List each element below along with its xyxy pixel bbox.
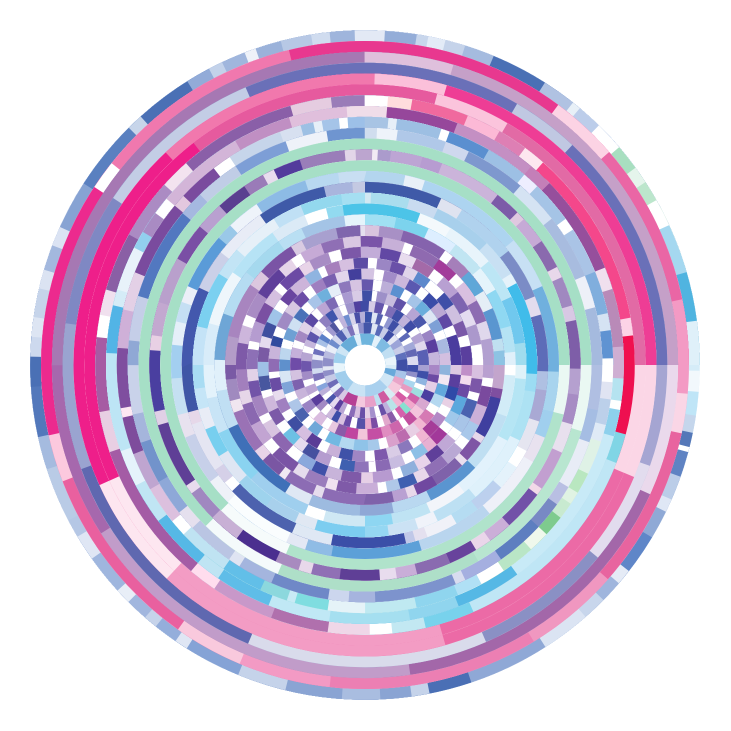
ring 4 xyxy=(68,68,662,662)
ring 26 xyxy=(306,306,424,424)
ring 5 xyxy=(79,79,651,651)
ring 9 xyxy=(122,122,608,608)
ring 22 xyxy=(263,263,467,467)
ring 8 xyxy=(112,112,618,618)
ring 21 xyxy=(252,252,478,478)
ring 27 xyxy=(317,317,413,413)
ring 14 xyxy=(176,176,554,554)
ring 29 xyxy=(339,339,391,391)
ring 16 xyxy=(198,198,532,532)
ring 28 xyxy=(328,328,402,402)
ring 12 xyxy=(155,155,575,575)
ring 15 xyxy=(187,187,543,543)
ring 23 xyxy=(274,274,456,456)
ring 13 (green) xyxy=(166,166,564,564)
ring 24 xyxy=(285,285,445,445)
ring 20 xyxy=(242,242,488,488)
ring 18 xyxy=(220,220,510,510)
ring 19 xyxy=(231,231,499,499)
ring 10 xyxy=(133,133,597,597)
ring 25 xyxy=(296,296,434,434)
ring 2 xyxy=(46,46,684,684)
ring 7 xyxy=(101,101,629,629)
ring 3 xyxy=(57,57,673,673)
ring 6 xyxy=(90,90,640,640)
ring 17 xyxy=(209,209,521,521)
ring 11 (green) xyxy=(144,144,586,586)
